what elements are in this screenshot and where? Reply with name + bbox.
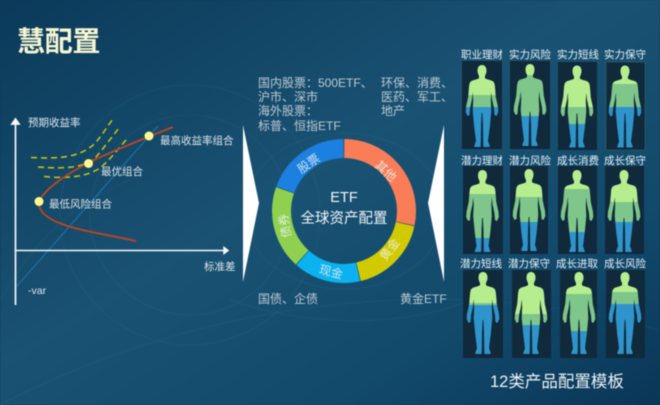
row 1	[461, 48, 646, 150]
row 2	[461, 154, 646, 254]
row 3	[460, 257, 646, 358]
template: 潜力短线	[460, 257, 503, 358]
template: 潜力风险: 潜力风险	[509, 154, 551, 167]
asset descriptions: 黄金ETF	[400, 291, 447, 306]
chart labels	[28, 116, 236, 297]
chart labels: 预期收益率	[28, 116, 80, 129]
template: 实力短线: 实力短线	[557, 48, 599, 61]
asset descriptions: 沪市、深市	[258, 89, 318, 104]
template: 实力风险: 实力风险	[509, 48, 551, 61]
template: 实力保守	[604, 48, 646, 150]
chart labels: 最低风险组合	[49, 198, 112, 210]
arrow: right	[428, 125, 444, 282]
template: 成长风险	[604, 257, 646, 358]
indifference curves	[31, 119, 127, 177]
donut chart	[275, 148, 406, 282]
donut chart: 黄金	[376, 235, 403, 263]
template: 成长进取	[556, 258, 599, 358]
lowest risk point	[34, 197, 44, 206]
donut chart: 债券	[275, 213, 294, 239]
donut chart: 股票	[295, 151, 323, 176]
asset descriptions: 标普、恒指ETF	[258, 118, 341, 133]
asset descriptions: 医药、军工、	[381, 90, 453, 104]
template: 潜力保守: 潜力保守	[508, 257, 550, 270]
donut centre label: 全球资产配置	[300, 209, 388, 227]
blue capital line	[16, 126, 158, 287]
donut chart: 其他	[372, 158, 399, 184]
title: 慧配置	[17, 26, 100, 57]
asset descriptions: 国债、企债	[258, 291, 318, 306]
template: 实力短线	[557, 48, 599, 150]
template: 潜力风险	[509, 154, 551, 254]
x axis	[16, 248, 228, 254]
asset descriptions	[258, 76, 453, 306]
asset descriptions: 环保、消费、	[381, 76, 453, 90]
template: 成长进取: 成长进取	[556, 258, 598, 270]
template: 成长风险: 成长风险	[604, 257, 646, 270]
template: 潜力理财: 潜力理财	[461, 154, 503, 167]
donut chart: 现金	[318, 261, 345, 282]
chart labels: 最高收益率组合	[160, 134, 234, 147]
template: 实力风险	[509, 48, 551, 149]
product templates grid	[460, 48, 646, 358]
template: 潜力保守	[508, 257, 551, 358]
template: 职业理财	[461, 48, 503, 149]
arrow: left	[243, 125, 259, 282]
template: 成长消费: 成长消费	[557, 154, 599, 167]
template: 潜力理财	[461, 154, 503, 254]
donut centre label	[300, 190, 388, 227]
grid caption: 12类产品配置模板	[490, 372, 624, 391]
risk-return chart	[12, 116, 236, 305]
template: 职业理财: 职业理财	[461, 48, 503, 61]
optimal point	[84, 159, 93, 168]
efficient frontier curve	[39, 127, 173, 241]
template: 实力保守: 实力保守	[604, 48, 646, 61]
highest return point	[144, 132, 154, 140]
asset descriptions: 国内股票：500ETF、	[258, 76, 373, 90]
chart labels: -var	[28, 285, 47, 297]
template: 成长消费	[557, 154, 599, 254]
template: 成长保守	[604, 154, 646, 254]
chart labels: 标准差	[204, 260, 236, 273]
template: 潜力短线: 潜力短线	[460, 257, 502, 270]
chart labels: 最优组合	[101, 165, 143, 178]
donut centre label: ETF	[330, 190, 358, 206]
asset descriptions: 地产	[381, 104, 405, 118]
y axis	[12, 119, 19, 305]
template: 成长保守: 成长保守	[604, 154, 646, 167]
asset descriptions: 海外股票：	[258, 103, 318, 118]
